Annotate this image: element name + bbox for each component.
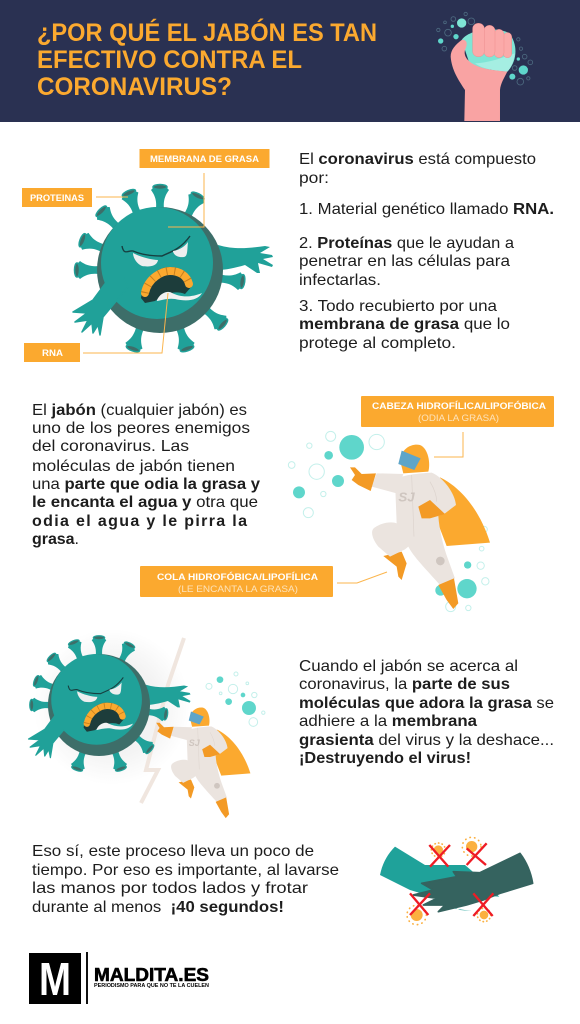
icon: fist squeezing soap: [437, 12, 533, 121]
label: cola hidrofobica: [140, 566, 333, 597]
text block: soap destroys the virus: [299, 658, 554, 767]
leader lines: [337, 432, 463, 583]
hero figure: [156, 707, 250, 818]
label: proteinas: PROTEINAS: [30, 193, 84, 204]
text block: soap molecules: una parte que odia la grasa y: [32, 476, 260, 493]
label: cabeza hidrofilica: [361, 396, 554, 427]
text block: soap molecules: odia el agua y le pirra la: [32, 513, 247, 530]
text block: soap destroys the virus: adhiere a la membrana: [299, 713, 477, 730]
label: proteinas: [22, 188, 92, 207]
hero figure: SJ: [189, 738, 201, 748]
icon: washing hands with crossed germs: [380, 837, 533, 925]
text block: forty seconds: durante al menos ¡40 segundos!: [32, 899, 284, 916]
text block: soap molecules: grasa.: [32, 531, 79, 548]
header band: [0, 0, 580, 122]
text block: composition of the coronavirus: infectarlas.: [299, 272, 381, 289]
label: cola hidrofobica: (LE ENCANTA LA GRASA): [178, 584, 298, 595]
virus character: [73, 184, 273, 354]
title: [37, 17, 377, 101]
text block: composition of the coronavirus: 3. Todo recubierto por una: [299, 298, 497, 315]
text block: forty seconds: [32, 843, 339, 916]
shadow halo: [34, 629, 190, 785]
logo: Maldita.es: [29, 952, 209, 1005]
illustration: hero in hazmat suit with labels: [140, 396, 554, 612]
text block: soap destroys the virus: coronavirus, la parte de sus: [299, 676, 510, 693]
text block: soap destroys the virus: ¡Destruyendo el virus!: [299, 750, 471, 767]
text block: composition of the coronavirus: por:: [299, 170, 329, 187]
illustration: coronavirus with labels: [22, 149, 273, 362]
text block: forty seconds: tiempo. Por eso es importante, al lavarse: [32, 862, 339, 879]
hero figure: SJ: [398, 490, 415, 505]
text block: soap molecules: El jabón (cualquier jabón) es: [32, 402, 247, 419]
text block: composition of the coronavirus: 2. Proteínas que le ayudan a: [299, 235, 514, 252]
text block: composition of the coronavirus: [299, 151, 554, 352]
text block: soap molecules: moléculas de jabón tienen: [32, 458, 235, 475]
title: ¿POR QUÉ EL JABÓN ES TAN: [37, 17, 377, 47]
lightning bolt: [141, 638, 184, 803]
illustration: hero fighting virus: [29, 629, 265, 818]
text block: composition of the coronavirus: protege al completo.: [299, 335, 456, 352]
label: RNA: [24, 343, 80, 362]
text block: forty seconds: Eso sí, este proceso lleva un poco de: [32, 843, 314, 860]
label: cabeza hidrofilica: (ODIA LA GRASA): [418, 413, 499, 424]
logo: Maldita.es: M: [39, 953, 71, 1005]
title: CORONAVIRUS?: [37, 73, 232, 101]
text block: soap molecules: del coronavirus. Las: [32, 438, 189, 455]
label: membrana de grasa: MEMBRANA DE GRASA: [150, 154, 259, 165]
label: membrana de grasa: [140, 149, 270, 168]
text block: composition of the coronavirus: membrana de grasa que lo: [299, 316, 510, 333]
text block: soap destroys the virus: Cuando el jabón se acerca al: [299, 658, 518, 675]
bubbles: [288, 431, 489, 612]
hero figure: [350, 445, 490, 609]
text block: soap destroys the virus: moléculas que adora la grasa se: [299, 695, 554, 712]
title: EFECTIVO CONTRA EL: [37, 46, 302, 74]
leader lines: [83, 173, 204, 353]
text block: composition of the coronavirus: 1. Material genético llamado RNA.: [299, 201, 554, 218]
text block: composition of the coronavirus: El coronavirus está compuesto: [299, 151, 536, 168]
text block: composition of the coronavirus: penetrar en las células para: [299, 253, 510, 270]
bubbles: [206, 672, 265, 726]
logo: Maldita.es: MALDITA.ES: [94, 965, 209, 985]
label: cabeza hidrofilica: CABEZA HIDROFÍLICA/LIPOFÓBICA: [372, 400, 546, 412]
label: RNA: RNA: [42, 348, 63, 359]
text block: soap molecules: le encanta el agua y otra que: [32, 494, 258, 511]
virus character: [29, 636, 191, 773]
label: cola hidrofobica: COLA HIDROFÓBICA/LIPOFÍLICA: [157, 571, 318, 583]
logo: Maldita.es: PERIODISMO PARA QUE NO TE LA CUELEN: [94, 983, 209, 989]
text block: soap destroys the virus: grasienta del virus y la deshace...: [299, 732, 554, 749]
text block: soap molecules: uno de los peores enemigos: [32, 420, 250, 437]
text block: forty seconds: las manos por todos lados y frotar: [32, 880, 309, 897]
text block: soap molecules: [32, 402, 260, 548]
